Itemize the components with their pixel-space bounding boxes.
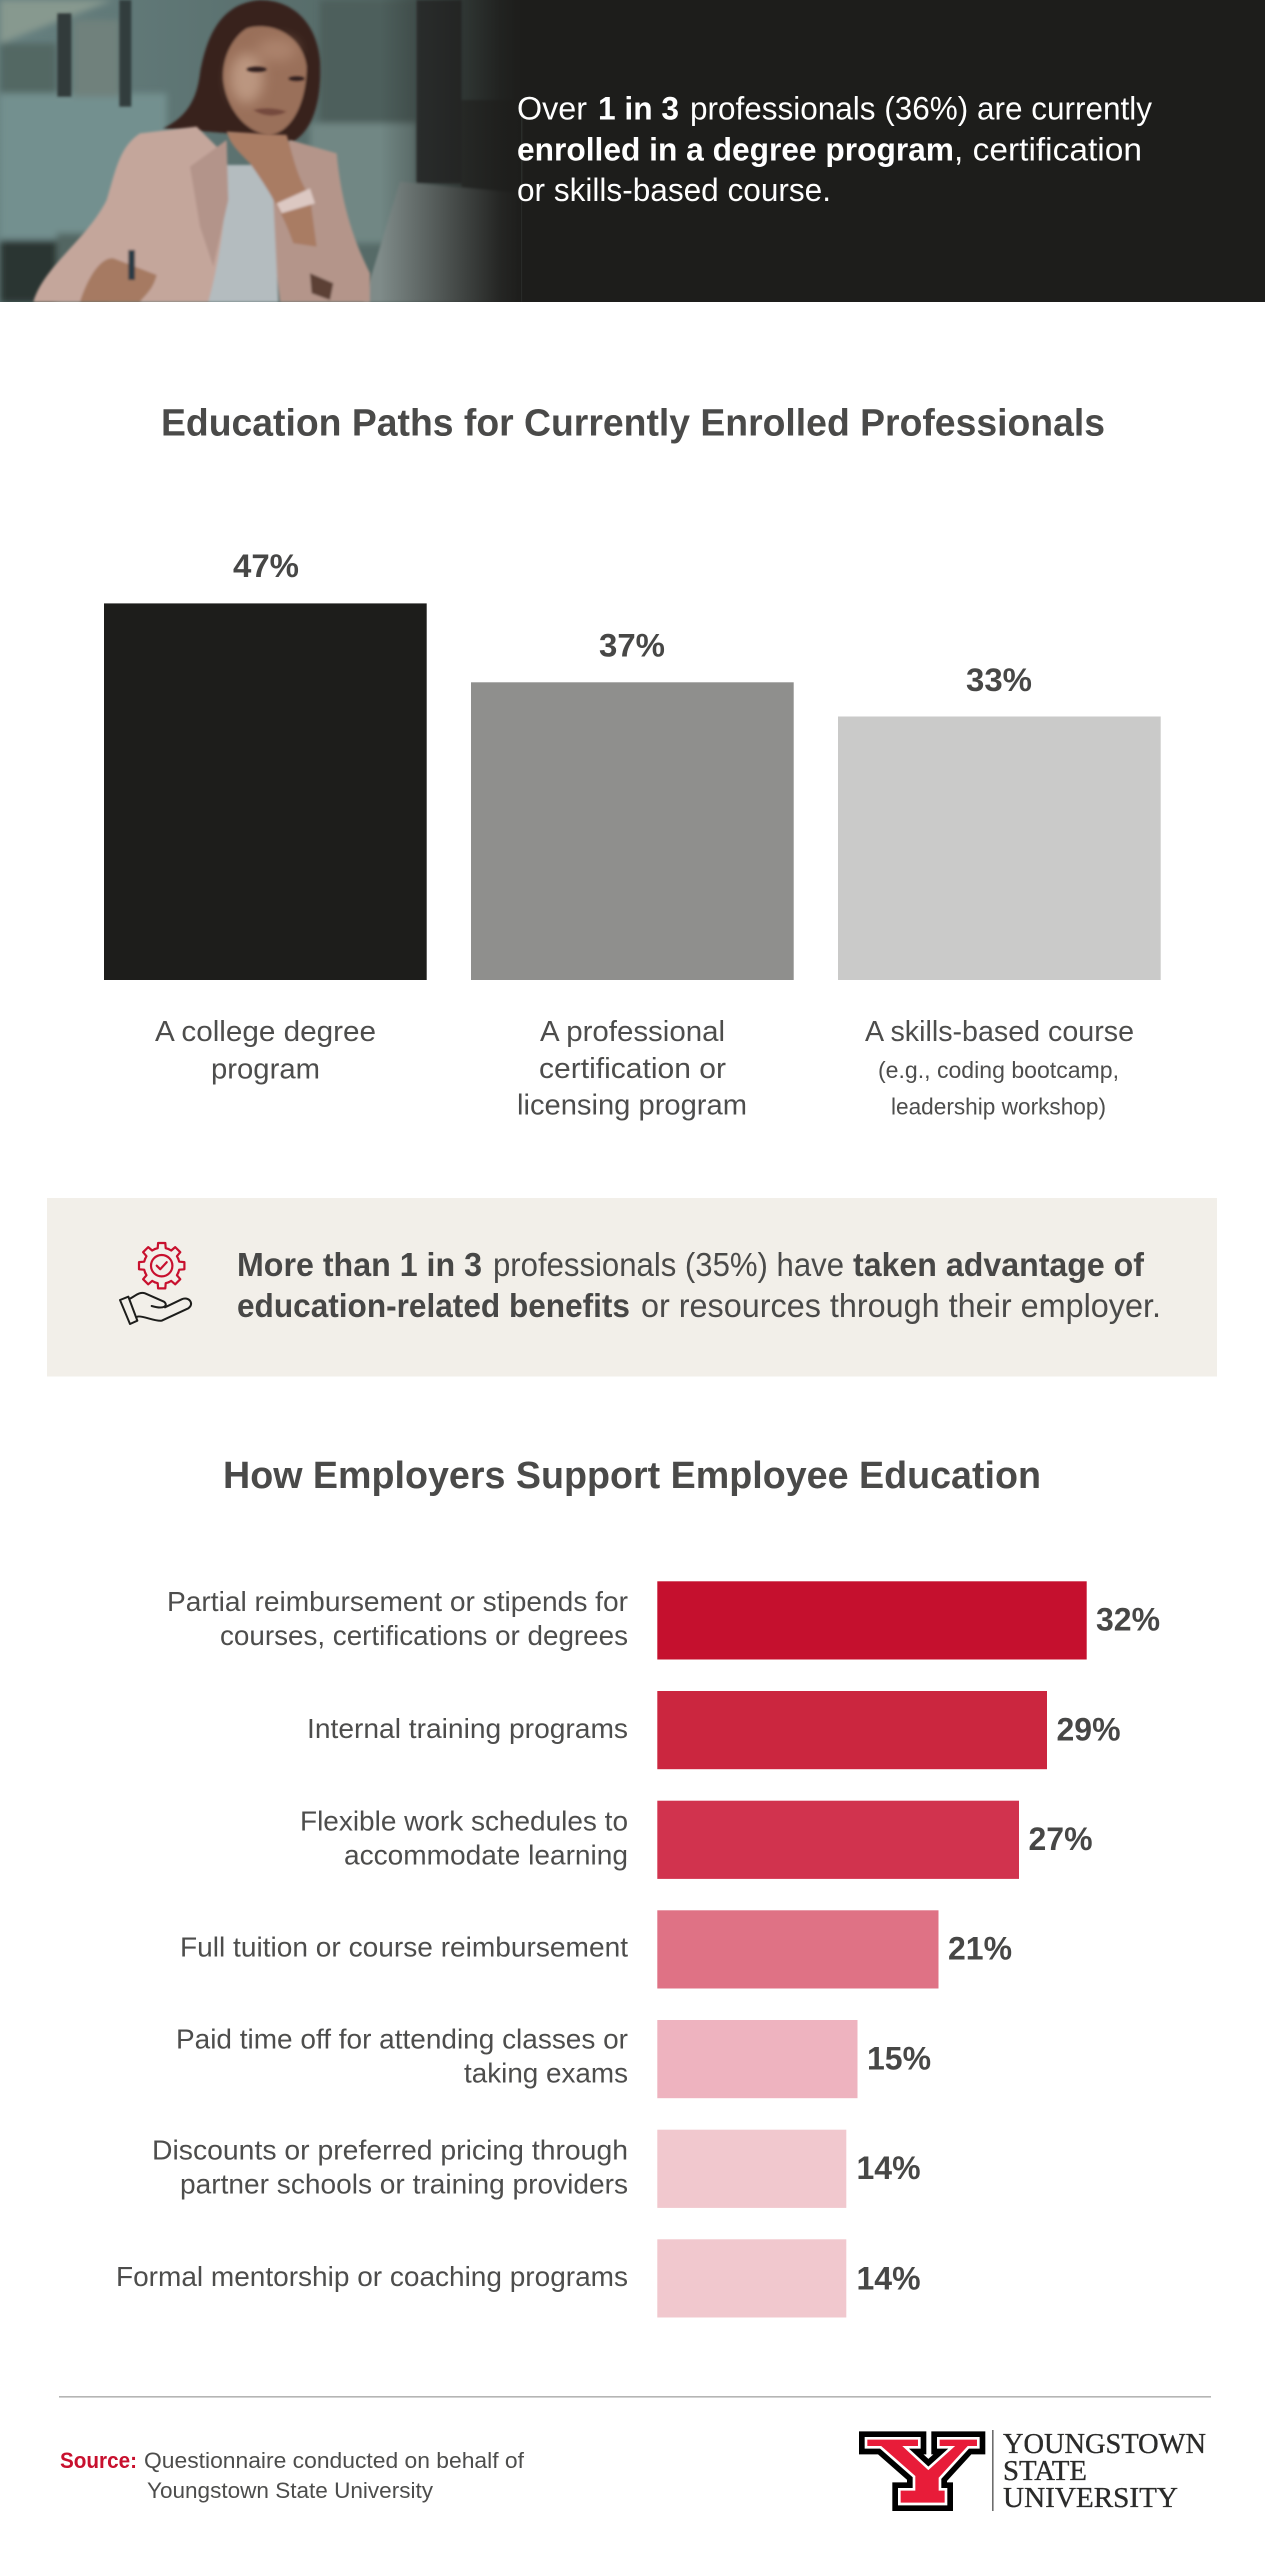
headline text <box>518 96 1152 202</box>
row: mentorship 14%: 14% <box>856 2260 920 2296</box>
row: discounts 14%: Discounts or preferred pricing through <box>152 2134 628 2166</box>
callout text: or resources through their employer. <box>641 1287 1161 1324</box>
row: partial reimbursement 32%: courses, certifications or degrees <box>220 1620 628 1651</box>
icon: gear above open hand <box>120 1243 191 1324</box>
wordmark: UNIVERSITY <box>1003 2483 1178 2514</box>
row: flexible work schedules 27% <box>300 1801 1092 1879</box>
row: discounts 14%: partner schools or training providers <box>180 2168 628 2200</box>
row: full tuition 21%: 21% <box>948 1931 1012 1967</box>
wordmark: STATE <box>1003 2456 1087 2487</box>
logo: Youngstown State University <box>866 2429 1206 2514</box>
headline text: , certification <box>954 132 1142 168</box>
row: flexible work schedules 27%: accommodate learning <box>344 1840 628 1870</box>
chart: employer support horizontal bars <box>116 1581 1160 2318</box>
row: flexible work schedules 27%: 27% <box>1028 1821 1092 1857</box>
headline text: professionals (36%) are currently <box>690 90 1152 126</box>
source note <box>60 2448 525 2503</box>
bar: professional certification 37%: certification or <box>539 1053 726 1085</box>
bar: college degree 47%: 47% <box>233 548 299 584</box>
chart: education paths bar chart <box>104 548 1161 1122</box>
callout text: More than 1 in 3 <box>237 1246 482 1283</box>
bar: skills-based course 33%: (e.g., coding bootcamp, <box>878 1057 1119 1083</box>
row: discounts 14% <box>152 2130 920 2208</box>
row: mentorship 14%: Formal mentorship or coaching programs <box>116 2261 628 2292</box>
callout text <box>237 1246 1161 1324</box>
row: mentorship 14% <box>116 2239 920 2318</box>
row: flexible work schedules 27%: Flexible work schedules to <box>300 1806 628 1836</box>
bar: skills-based course 33% <box>838 662 1161 1120</box>
row: full tuition 21% <box>180 1910 1012 1988</box>
bar: skills-based course 33%: A skills-based course <box>865 1016 1134 1048</box>
bar: professional certification 37%: licensing program <box>517 1090 747 1122</box>
bar: professional certification 37%: 37% <box>599 628 665 664</box>
bar: professional certification 37%: A professional <box>540 1016 725 1048</box>
row: full tuition 21%: Full tuition or course reimbursement <box>180 1932 628 1962</box>
wordmark: YOUNGSTOWN <box>1003 2429 1206 2460</box>
callout text: education-related benefits <box>237 1287 630 1324</box>
row: partial reimbursement 32%: Partial reimbursement or stipends for <box>167 1586 628 1617</box>
row: paid time off 15% <box>176 2020 931 2098</box>
source note: Youngstown State University <box>147 2478 433 2503</box>
heading: education paths: Education Paths for Currently Enrolled Professionals <box>161 402 1105 444</box>
row: paid time off 15%: taking exams <box>464 2058 628 2088</box>
logo mark: block Y <box>866 2438 978 2504</box>
row: partial reimbursement 32% <box>167 1581 1160 1660</box>
bar: skills-based course 33%: 33% <box>966 662 1032 698</box>
source note: Questionnaire conducted on behalf of <box>144 2448 525 2473</box>
bar: college degree 47%: program <box>211 1054 320 1086</box>
heading: how employers support: How Employers Support Employee Education <box>223 1455 1041 1497</box>
headline text: or skills-based course. <box>517 172 831 208</box>
panel: employer benefits callout <box>47 1198 1217 1376</box>
row: discounts 14%: 14% <box>856 2150 920 2186</box>
headline text: 1 in 3 <box>598 90 679 126</box>
headline text: Over <box>517 90 587 126</box>
row: internal training 29% <box>307 1691 1120 1769</box>
row: internal training 29%: 29% <box>1056 1711 1120 1747</box>
photo: professional woman at laptop <box>0 0 522 303</box>
row: paid time off 15%: 15% <box>867 2040 931 2076</box>
bar: college degree 47%: A college degree <box>155 1016 376 1048</box>
row: paid time off 15%: Paid time off for attending classes or <box>176 2024 628 2054</box>
bar: skills-based course 33%: leadership workshop) <box>891 1094 1106 1120</box>
row: internal training 29%: Internal training programs <box>307 1713 628 1744</box>
panel: header banner <box>0 0 1265 303</box>
wordmark <box>1003 2429 1206 2514</box>
bar: college degree 47% <box>104 548 427 1086</box>
headline text: enrolled in a degree program <box>517 132 954 168</box>
callout text: taken advantage of <box>853 1246 1145 1283</box>
bar: professional certification 37% <box>471 628 794 1122</box>
callout text: professionals (35%) have <box>493 1246 844 1283</box>
row: partial reimbursement 32%: 32% <box>1096 1602 1160 1638</box>
source note: Source: <box>60 2448 137 2473</box>
